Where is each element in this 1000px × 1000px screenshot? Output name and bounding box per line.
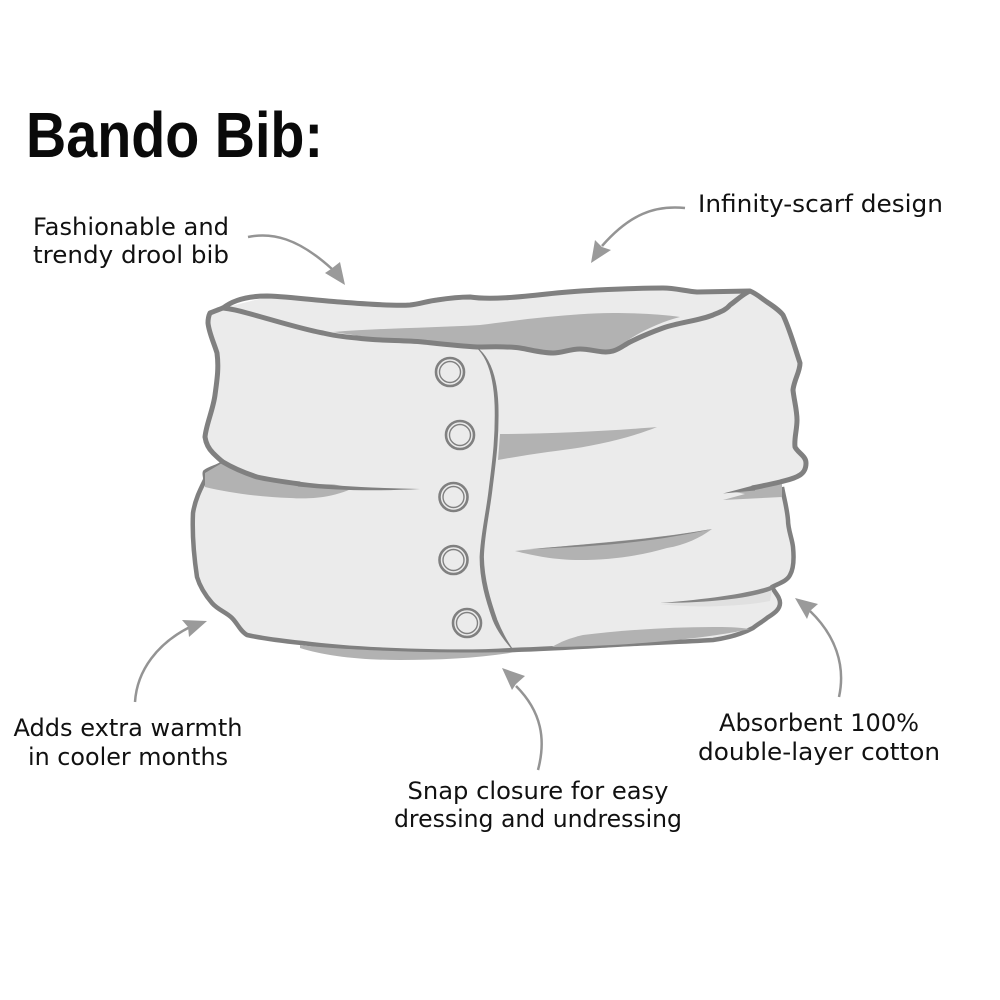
bib upper fold (205, 291, 806, 488)
bib lower fold (193, 463, 794, 652)
callout: absorbent cotton: Absorbent 100% (719, 709, 919, 737)
callout: infinity scarf: Infinity-scarf design (698, 190, 943, 218)
crease lines (530, 529, 773, 603)
snap placket seam (476, 347, 513, 650)
callout: absorbent cotton (698, 709, 940, 766)
callout: warmth: Adds extra warmth (14, 714, 243, 742)
snap buttons (436, 358, 481, 637)
interior shadow (333, 313, 680, 354)
title: Bando Bib: (26, 99, 323, 171)
callout: fashionable (33, 213, 229, 269)
upper fold crease shadow (498, 427, 657, 460)
callout: fashionable: Fashionable and (33, 213, 229, 241)
faint crease shadow (660, 590, 772, 606)
arrow: warmth (135, 620, 207, 702)
bib back top edge (223, 288, 750, 308)
bib illustration (193, 288, 806, 660)
callout: fashionable: trendy drool bib (33, 241, 229, 269)
callout: absorbent cotton: double-layer cotton (698, 738, 940, 766)
callout: warmth: in cooler months (28, 743, 228, 771)
callout: snap closure (394, 777, 682, 833)
callout: snap closure: dressing and undressing (394, 805, 682, 833)
arrow: absorbent cotton (795, 598, 841, 697)
upper fold tapered ends (298, 482, 755, 494)
bib back interior fill (223, 289, 750, 360)
arrow: snap closure (502, 668, 542, 770)
arrow: fashionable (248, 235, 345, 285)
callout: snap closure: Snap closure for easy (408, 777, 668, 805)
callout: warmth (14, 714, 243, 771)
fold shadows (205, 463, 782, 660)
arrow: infinity scarf (591, 207, 685, 263)
